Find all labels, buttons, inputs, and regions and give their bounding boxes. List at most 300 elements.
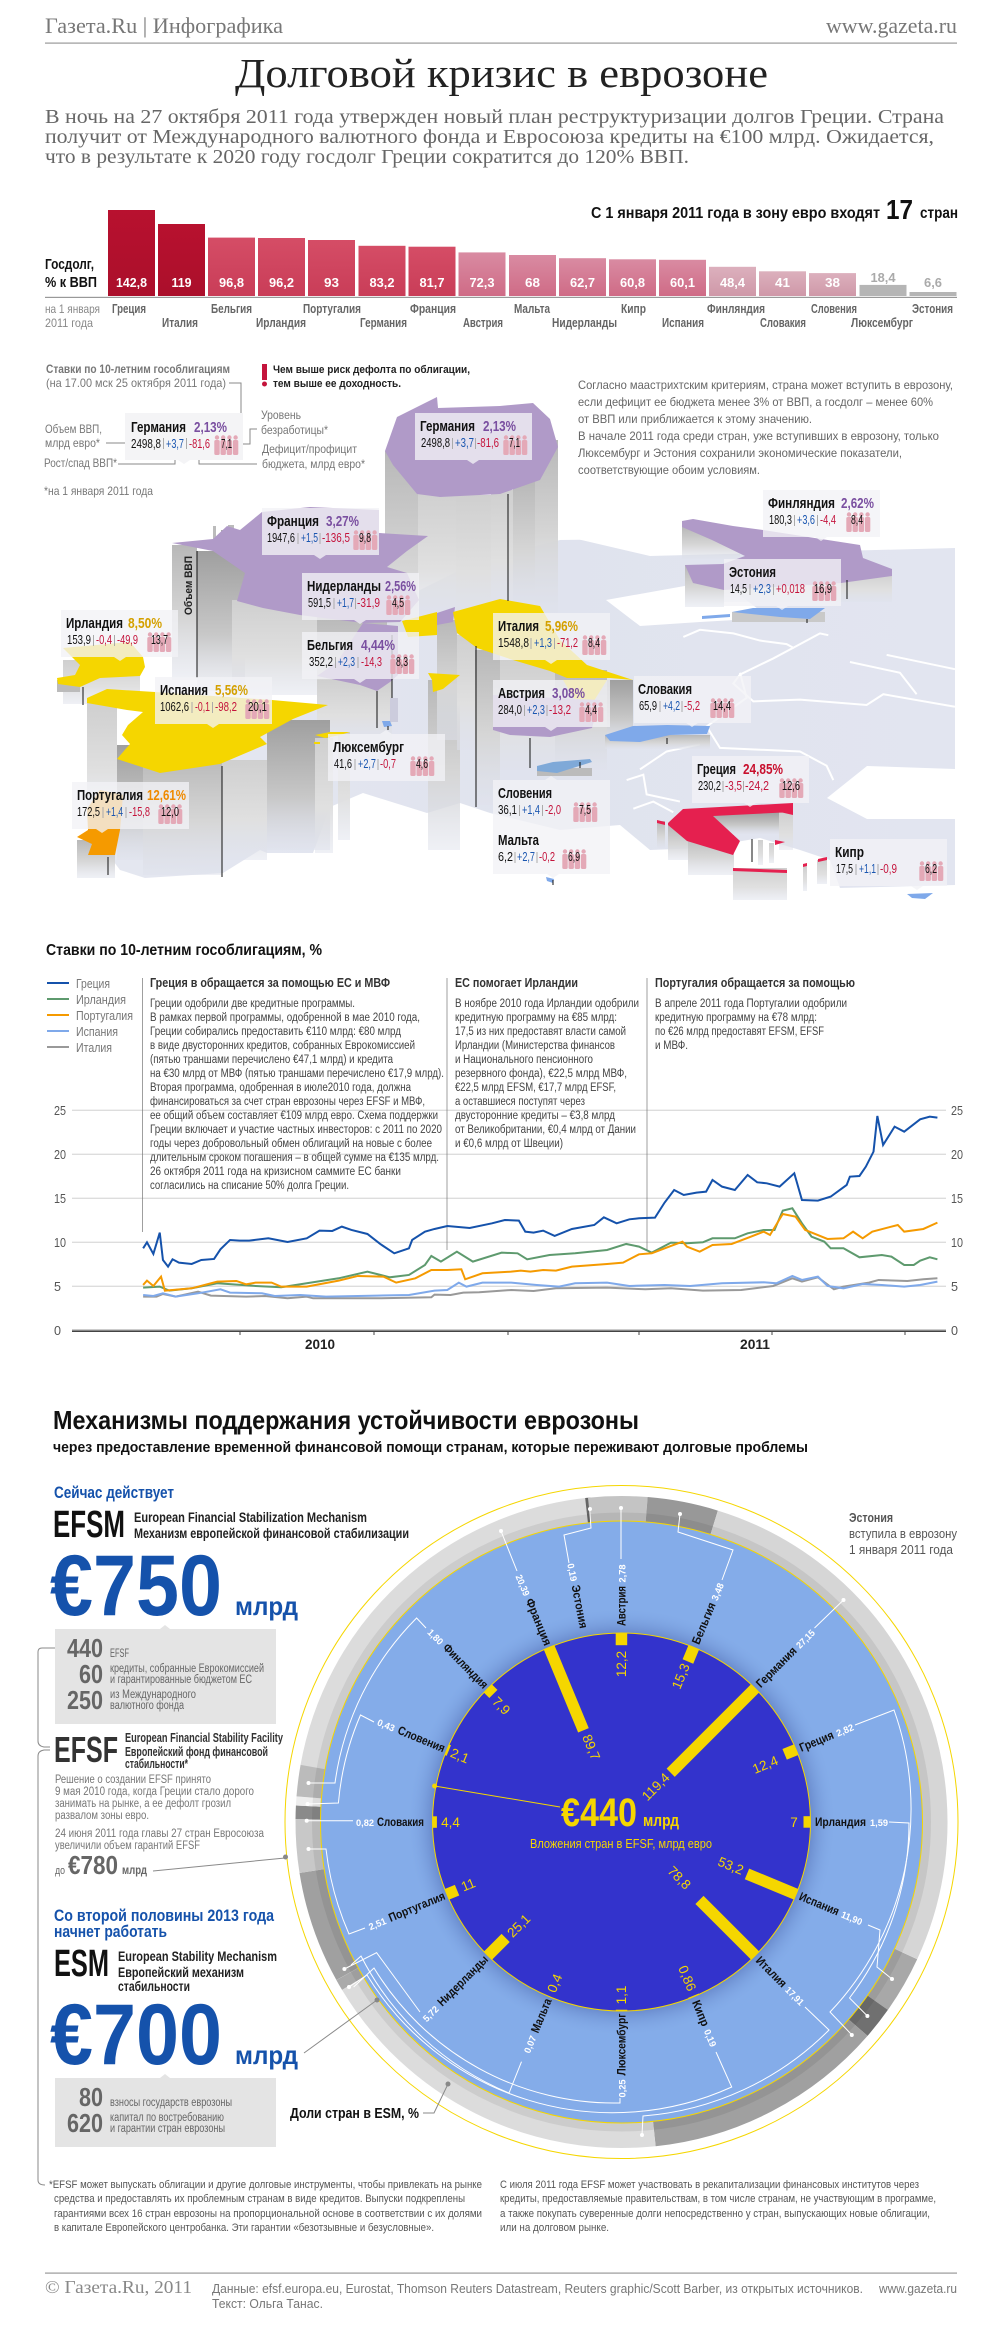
axis labels: 2010 (305, 1336, 335, 1352)
legend captions: млрд евро* (45, 436, 100, 450)
axis labels: 15 (951, 1191, 963, 1206)
note: Portugal: Португалия обращается за помощью (655, 975, 855, 990)
risk warning: тем выше ее доходность. (273, 378, 401, 390)
country labels left half: 0,19 (564, 1563, 579, 1582)
EFSF block: European Financial Stability Facility (125, 1731, 283, 1745)
country labels: Италия (162, 316, 198, 330)
780 amount: €780 (68, 1850, 118, 1880)
note: Greece: финансироваться за счет стран еврозоны через EFSF и МВФ, (150, 1096, 425, 1108)
card: Франция (262, 508, 379, 559)
EFSF block: Решение о создании EFSF принято (55, 1774, 211, 1786)
card: Австрия: 284,0 (498, 703, 522, 717)
estonia note: 1 января 2011 года (849, 1542, 954, 1557)
card: Франция: Франция (267, 513, 319, 530)
eurozone count heading: С 1 января 2011 года в зону евро входят (591, 205, 880, 222)
debt bar chart (45, 194, 958, 330)
contribution bars (432, 1633, 810, 2011)
bar values: 12,2 (614, 1651, 629, 1677)
legend captions: *на 1 января 2011 года (44, 484, 153, 498)
ESM breakdown box: взносы государств еврозоны (110, 2097, 232, 2109)
maastricht criteria text: В начале 2011 года среди стран, уже вступивших в еврозону, только (578, 429, 939, 443)
country labels right half: 2,78 (618, 1564, 628, 1582)
card: Ирландия: 8,50% (128, 615, 162, 632)
note: Ireland: двусторонние кредиты – €3,8 млрд (455, 1110, 615, 1122)
card: Австрия: -13,2 (549, 703, 571, 717)
card: Кипр (830, 839, 947, 890)
country labels right half: Ирландия (815, 1815, 866, 1829)
EFSF block: Европейский фонд финансовой (125, 1745, 268, 1759)
bracket line (38, 1648, 55, 2185)
card: Эстония: 16,9 (814, 582, 832, 596)
axis labels: 20 (54, 1147, 66, 1162)
EFSF block: стабильности* (125, 1757, 188, 1771)
bar values: 48,4 (720, 275, 746, 290)
footnotes: *EFSF может выпускать облигации и другие долговые инструменты, чтобы привлекать на рынке (49, 2179, 482, 2191)
card: Финляндия: +3,6 (797, 513, 815, 527)
bar values: 60,1 (670, 275, 695, 290)
grid and axes (72, 978, 946, 1335)
chart legend: Ирландия (76, 993, 126, 1007)
card: Греция: -24,2 (745, 779, 769, 793)
center total: €440 (561, 1791, 637, 1835)
country labels: Мальта (514, 302, 551, 316)
card: Нидерланды: 591,5 (308, 596, 331, 610)
bar values: 53,2 (716, 1854, 746, 1878)
card: Германия: 2,13% (483, 418, 516, 435)
axis labels: 0 (54, 1323, 61, 1338)
note: Ireland: кредитную программу на €85 млрд: (455, 1012, 617, 1024)
legend captions: Рост/спад ВВП* (44, 456, 117, 470)
bars (108, 210, 956, 296)
card: Австрия: 4,4 (585, 703, 597, 717)
note: Greece: годы через добровольный обмен облигаций на новые с более (150, 1138, 432, 1150)
note: Portugal: В апреле 2011 года Португалии одобрили (655, 998, 847, 1010)
center total: млрд (643, 1811, 679, 1830)
note: Portugal (655, 975, 855, 1052)
card: Нидерланды: +1,7 (337, 596, 354, 610)
footnotes: С июля 2011 года EFSF может участвовать в рекапитализации финансовых институтов через (500, 2179, 919, 2191)
header rule (45, 42, 957, 44)
bar values: 93 (324, 275, 339, 290)
bar values: 12,4 (750, 1753, 781, 1777)
bar values: 78,8 (665, 1863, 694, 1892)
note: Greece: на €30 млрд от МВФ (пятью траншами перечислено €17,9 млрд). (150, 1068, 444, 1080)
country labels left half: 0,07 (522, 2034, 539, 2055)
chart legend: Португалия (76, 1009, 133, 1023)
bar values (441, 1651, 798, 2004)
country labels: Греция (112, 302, 146, 316)
bar values: 38 (825, 275, 840, 290)
brand line: Газета.Ru | Инфографика (45, 13, 283, 38)
card: Португалия: +1,4 (106, 805, 123, 819)
card: Германия: 7,1 (509, 436, 520, 450)
center total (432, 1784, 712, 1851)
axis labels: 2011 (740, 1336, 770, 1352)
card: Франция: +1,5 (301, 531, 318, 545)
card: Финляндия: 180,3 (769, 513, 792, 527)
EFSF block: занимать на рынке, а ее дефолт грозил (55, 1798, 231, 1810)
risk warning (262, 364, 470, 390)
axis labels: 5 (951, 1279, 958, 1294)
eurozone count heading (591, 194, 958, 225)
card: Эстония: Эстония (729, 564, 776, 581)
note: Ireland: а оставшиеся поступят через (455, 1096, 585, 1108)
card: Нидерланды: 4,5 (392, 596, 404, 610)
card: Кипр: 17,5 (836, 862, 853, 876)
country labels left half: Люксембург (614, 2014, 628, 2076)
country labels: Португалия (303, 302, 361, 316)
bar values: 7 (790, 1815, 798, 1830)
outer yellow ring (285, 1486, 958, 2158)
maastricht criteria text: Люксембург и Эстония сохранили экономические показатели, (578, 446, 902, 460)
card: Люксембург: +2,7 (358, 757, 376, 771)
footer (45, 2272, 957, 2311)
card: Испания: 5,56% (215, 682, 248, 699)
card: Люксембург (328, 730, 445, 781)
ESM block: Со второй половины 2013 года (54, 1906, 274, 1925)
card: Словакия: 14,4 (713, 699, 731, 713)
card: Финляндия: 2,62% (841, 495, 874, 512)
land background (105, 535, 955, 888)
maastricht criteria text: если дефицит ее бюджета менее 3% от ВВП, а госдолг – менее 60% (578, 395, 933, 409)
ESM block: Европейский механизм (118, 1965, 244, 1980)
legend connectors (106, 383, 257, 464)
ESM breakdown box: 80 (79, 2082, 103, 2112)
mechanisms heading: Механизмы поддержания устойчивости еврозоны (53, 1405, 639, 1435)
card: Финляндия: 8,4 (851, 513, 863, 527)
intro text: получит от Международного валютного фонда и Евросоюза кредиты на €100 млрд. Ожидается, (45, 126, 934, 148)
country labels: Словакия (760, 316, 806, 330)
maastricht criteria text: Согласно маастрихтским критериям, страна может вступить в еврозону, (578, 378, 953, 392)
bar values: 81,7 (420, 275, 444, 290)
gdp axis label: Объем ВВП (183, 556, 195, 615)
legend sample card: +3,7 (166, 437, 184, 451)
central disc (432, 1633, 810, 2011)
card: Эстония: 14,5 (730, 582, 747, 596)
bar values: 15,3 (669, 1661, 693, 1691)
maastricht criteria text (578, 378, 953, 477)
axis caption: Госдолг, (45, 256, 94, 273)
chart legend (47, 977, 133, 1055)
note: Greece (150, 975, 444, 1192)
country labels: Люксембург (851, 316, 913, 330)
country labels left half: Португалия (386, 1889, 447, 1925)
bar values: 89,7 (579, 1732, 603, 1762)
card: Италия: -71,2 (557, 636, 578, 650)
card: Нидерланды: Нидерланды (307, 578, 381, 595)
card: Германия: +3,7 (455, 436, 474, 450)
note: Ireland: Ирландии (Министерства финансов (455, 1040, 615, 1052)
note: Greece: В рамках первой программы, одобренной в мае 2010 года, (150, 1012, 420, 1024)
EFSF block: развалом зоны евро. (55, 1810, 149, 1822)
card: Бельгия: +2,3 (338, 655, 355, 669)
maastricht criteria text: от ВВП или приближается к этому значению. (578, 412, 812, 426)
ESM share caption: Доли стран в ESM, % (290, 2105, 419, 2122)
EFSM breakdown box: 250 (67, 1685, 103, 1715)
estonia note: Эстония (849, 1510, 893, 1525)
country labels right half: Испания (797, 1889, 841, 1918)
card: Португалия: 12,61% (147, 787, 186, 804)
card: Словакия: +4,2 (663, 699, 680, 713)
axis labels: 20 (951, 1147, 963, 1162)
card: Кипр: +1,1 (859, 862, 876, 876)
card: Словакия: 65,9 (639, 699, 657, 713)
bar values: 18,4 (870, 270, 896, 285)
card: Австрия: 3,08% (552, 685, 585, 702)
country labels left half: 5,72 (421, 2004, 442, 2025)
card: Италия: Италия (498, 618, 539, 635)
card: Греция: -3,5 (725, 779, 742, 793)
card: Бельгия (302, 632, 419, 683)
footnotes: кредиты, предоставляемые правительствам, в том числе странам, не участвующим в программе, (500, 2193, 936, 2205)
axis caption: на 1 января (45, 302, 100, 316)
country labels left half: Словакия (377, 1815, 424, 1829)
EFSF block: 24 июня 2011 года главы 27 стран Евросоюза (55, 1828, 265, 1840)
country labels: Нидерланды (552, 316, 617, 330)
750 amount: €750 (50, 1538, 222, 1634)
ESM breakdown box: капитал по востребованию (110, 2112, 224, 2124)
country labels: Бельгия (211, 302, 252, 316)
EFSF block: EFSF (54, 1729, 118, 1770)
axis labels: 10 (54, 1235, 66, 1250)
country labels left half: Мальта (528, 1996, 555, 2035)
EFSM breakdown box: и гарантированные бюджетом ЕС (110, 1674, 252, 1686)
legend captions: Уровень (261, 408, 301, 422)
intro text: что в результате к 2020 году госдолг Греции сократится до 120% ВВП. (45, 146, 689, 168)
mechanisms heading (53, 1405, 808, 1456)
bar values: 41 (775, 275, 790, 290)
country labels: Кипр (621, 302, 646, 316)
note: Ireland: 17,5 из них предоставят власти самой (455, 1026, 626, 1038)
card: Словения: 36,1 (498, 803, 517, 817)
card: Испания: Испания (160, 682, 208, 699)
card: Мальта: Мальта (498, 832, 539, 849)
footer: www.gazeta.ru (878, 2282, 957, 2296)
note: Greece: 26 октября 2011 года на кризисном саммите ЕС банки (150, 1166, 401, 1178)
axis labels: 0 (951, 1323, 958, 1338)
card: Ирландия: 153,9 (67, 633, 91, 647)
bar values: 0,86 (675, 1963, 699, 1993)
country labels left half: 1,80 (425, 1627, 445, 1648)
card: Италия: 8,4 (588, 636, 600, 650)
estonia note: вступила в еврозону (849, 1526, 957, 1541)
country labels: Словения (811, 302, 857, 316)
chart legend: Греция (76, 977, 110, 991)
note: Greece: согласились на списание 50% долга Греции. (150, 1180, 349, 1192)
EFSM breakdown box: 440 (67, 1633, 103, 1663)
bar values: 96,8 (219, 275, 244, 290)
EFSM breakdown box: кредиты, собранные Еврокомиссией (110, 1663, 264, 1675)
country labels left half: Эстония (569, 1584, 591, 1629)
card: Словакия: -5,2 (684, 699, 700, 713)
country labels right half: 1,59 (870, 1818, 888, 1829)
country labels right half: Италия (753, 1954, 790, 1990)
EFSM breakdown box: 60 (79, 1659, 103, 1689)
copyright: © Газета.Ru, 2011 (45, 2277, 192, 2297)
seas (560, 530, 955, 819)
card: Бельгия: 352,2 (309, 655, 333, 669)
card: Франция: 9,8 (359, 531, 371, 545)
card: Ирландия: Ирландия (66, 615, 123, 632)
card: Мальта: +2,7 (517, 850, 535, 864)
card: Нидерланды: 2,56% (385, 578, 416, 595)
mechanisms heading: через предоставление временной финансовой помощи странам, которые переживают долговые проблемы (53, 1439, 808, 1456)
risk warning: Чем выше риск дефолта по облигации, (273, 364, 470, 376)
axis labels (54, 1103, 963, 1352)
card: Мальта: 6,9 (568, 850, 580, 864)
bar values: 60,8 (620, 275, 645, 290)
card: Германия: 2498,8 (421, 436, 450, 450)
card: Бельгия: 8,3 (396, 655, 408, 669)
bar values: 11 (459, 1875, 478, 1894)
country labels right half: 17,91 (782, 1985, 806, 2009)
note: Ireland: ЕС помогает Ирландии (455, 975, 578, 990)
country labels left half: 0,43 (375, 1717, 396, 1735)
ESM breakdown box: и гарантии стран еврозоны (110, 2123, 225, 2135)
note: Portugal: и МВФ. (655, 1040, 688, 1052)
circular diagram (153, 1380, 1000, 2264)
legend captions: Объем ВВП, (45, 422, 102, 436)
EFSM block: млрд (235, 1591, 298, 1621)
note: Greece: в виде двусторонних кредитов, собранных Еврокомиссией (150, 1040, 415, 1052)
bar values: 1,1 (614, 1986, 629, 2004)
card: Греция: 12,6 (782, 779, 800, 793)
card: Словения: +1,4 (522, 803, 540, 817)
note: Greece: Греции включает и участие частных инвесторов: с 2011 по 2020 (150, 1124, 442, 1136)
bar values: 119 (172, 275, 192, 290)
chart title: Ставки по 10-летним гособлигациям, % (46, 942, 322, 959)
card: Германия: -81,6 (477, 436, 499, 450)
country labels right half: 11,90 (839, 1910, 864, 1928)
axis labels: 25 (54, 1103, 66, 1118)
country labels right half: 0,19 (701, 2028, 718, 2049)
note: Portugal: по €26 млрд предоставят EFSM, EFSF (655, 1026, 824, 1038)
light blue ring (320, 1521, 922, 2123)
card: Франция: -136,5 (322, 531, 350, 545)
legend sample card: 7,1 (221, 437, 232, 451)
header (45, 13, 957, 44)
eurozone count heading: 17 (886, 194, 913, 225)
card: Ирландия (61, 610, 178, 661)
note: Greece: длительным сроком погашения – в общей сумме на €135 млрд. (150, 1152, 439, 1164)
card: Словакия: Словакия (638, 681, 692, 698)
legend captions: Ставки по 10-летним гособлигациям (46, 362, 230, 376)
card: Ирландия: -49,9 (117, 633, 138, 647)
bar values: 68 (525, 275, 540, 290)
card: Нидерланды (302, 573, 419, 624)
card: Испания: -98,2 (215, 700, 237, 714)
country labels right half: Греция (797, 1728, 836, 1755)
country shapes (57, 397, 933, 899)
baseline rule (45, 297, 957, 298)
ESM block: начнет работать (54, 1922, 167, 1941)
country labels left half: 20,39 (513, 1573, 531, 1598)
note: Ireland: и Национального пенсионного (455, 1054, 593, 1066)
card: Мальта: 6,2 (498, 850, 513, 864)
country labels left half: Франция (523, 1596, 555, 1648)
country labels right half: Германия (753, 1644, 800, 1690)
EFSM breakdown box: из Международного (110, 1689, 196, 1701)
card: Мальта (493, 827, 610, 878)
legend captions: безработицы* (261, 423, 328, 437)
card: Финляндия: Финляндия (768, 495, 835, 512)
country labels left half: Финляндия (440, 1641, 491, 1692)
card: Бельгия: 4,44% (361, 637, 395, 654)
780 amount: млрд (122, 1863, 147, 1877)
legend captions: (на 17.00 мск 25 октября 2011 года) (46, 376, 226, 390)
note: Ireland: В ноябре 2010 года Ирландии одобрили (455, 998, 639, 1010)
card: Бельгия: -14,3 (361, 655, 382, 669)
note: Greece: ее общий объем составляет €109 млрд евро. Схема поддержки (150, 1110, 438, 1122)
card: Испания: 1062,6 (160, 700, 189, 714)
700 amount: €700 (50, 1987, 222, 2083)
EFSF block: увеличили объем гарантий EFSF (55, 1840, 200, 1852)
estonia note (849, 1510, 957, 1557)
card: Кипр: 6,2 (925, 862, 937, 876)
country labels right half: 3,48 (710, 1582, 727, 1602)
footnotes: гарантиями всех 16 стран еврозоны на пропорциональной основе в соответствии с их долями (54, 2208, 482, 2220)
card: Люксембург: 4,6 (416, 757, 428, 771)
card: Словения (493, 776, 610, 827)
country labels (112, 302, 953, 330)
axis labels: 5 (54, 1279, 61, 1294)
note: Greece: Греции собирались предоставить €110 млрд: €80 млрд (150, 1026, 401, 1038)
country labels right half: Бельгия (689, 1600, 719, 1646)
card: Словения: -2,0 (545, 803, 561, 817)
bond yield line chart (46, 942, 963, 1352)
callout connectors (153, 1854, 450, 2113)
legend sample card (125, 413, 243, 464)
axis caption: % к ВВП (45, 274, 97, 291)
EFSM block (50, 1483, 409, 1724)
card: Словения: 7,5 (579, 803, 591, 817)
EFSM block: Сейчас действует (54, 1483, 174, 1502)
card: Испания: -0,1 (195, 700, 210, 714)
card: Кипр: -0,9 (880, 862, 897, 876)
bar values: 25,1 (504, 1911, 533, 1940)
axis caption (45, 256, 100, 330)
note: Greece: Греции одобрили две кредитные программы. (150, 998, 355, 1010)
note: Ireland (455, 975, 639, 1150)
legend captions: бюджета, млрд евро* (262, 457, 365, 471)
card: Финляндия: -4,4 (820, 513, 836, 527)
card: Франция: 3,27% (326, 513, 359, 530)
card: Греция: 24,85% (743, 761, 783, 778)
country labels: Франция (410, 302, 456, 316)
bar values: 119,4 (639, 1770, 673, 1804)
bar values: 7,9 (489, 1694, 513, 1718)
card: Греция: Греция (697, 761, 736, 778)
card: Мальта: -0,2 (539, 850, 555, 864)
gdp height lines (83, 494, 847, 885)
intro text (45, 106, 944, 168)
card: Португалия: Португалия (77, 787, 143, 804)
axis caption: 2011 года (45, 316, 93, 330)
card: Италия (493, 613, 610, 664)
country labels left half: 0,82 (356, 1818, 374, 1829)
card: Люксембург: -0,7 (380, 757, 396, 771)
legend captions (44, 362, 365, 498)
card: Португалия: -15,8 (129, 805, 150, 819)
axis labels: 25 (951, 1103, 963, 1118)
country labels right half: Кипр (689, 1998, 712, 2028)
note: Ireland: от Великобритании, €0,4 млрд от Дании (455, 1124, 636, 1136)
title: Долговой кризис в еврозоне (235, 50, 768, 96)
eurozone count heading: стран (920, 205, 958, 222)
card: Германия (415, 413, 532, 464)
note: Greece: Греция в обращается за помощью ЕС и МВФ (150, 975, 390, 990)
card: Германия: Германия (420, 418, 475, 435)
